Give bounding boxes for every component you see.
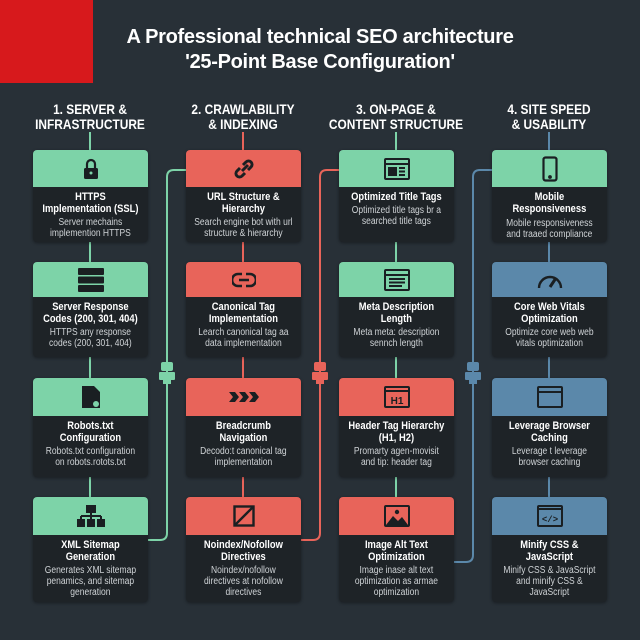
text: XML Sitemap Generation	[61, 539, 120, 563]
text: Minify CSS & JavaScript	[520, 539, 578, 563]
column 3: Optimized title tags br a searched title tags	[352, 205, 441, 227]
title	[126, 26, 514, 73]
text: Meta Description Length	[359, 301, 434, 325]
text: & INDEXING	[208, 116, 278, 132]
robot icons	[159, 362, 175, 384]
text: Canonical Tag Implementation	[209, 301, 278, 325]
text: </>	[541, 515, 558, 525]
text: Leverage t leverage browser caching	[512, 446, 587, 468]
column 3	[339, 150, 454, 242]
column 1	[33, 150, 148, 242]
column headings: 1. SERVER &	[53, 101, 127, 117]
text: Header Tag Hierarchy (H1, H2)	[348, 420, 444, 444]
column 2: URL Structure & Hierarchy	[207, 191, 280, 215]
column 4: Mobile responsiveness and traaed compliance	[506, 218, 593, 240]
text: Noindex/Nofollow Directives	[204, 539, 283, 563]
title: '25-Point Base Configuration'	[185, 51, 455, 73]
text: Image Alt Text Optimization	[365, 539, 428, 563]
column headings	[35, 101, 145, 132]
text: 3. ON-PAGE &	[356, 101, 436, 117]
text: Meta meta: description sennch length	[353, 327, 439, 349]
column 1: Server mechains implemention HTTPS	[50, 217, 131, 239]
column 3: Optimized Title Tags	[351, 191, 442, 203]
text: Optimize core web web vitals optimization	[505, 327, 594, 349]
column 1: HTTPS Implementation (SSL)	[42, 191, 138, 215]
text: Learch canonical tag aa data implementation	[198, 327, 289, 349]
column 4: Mobile Responsiveness	[512, 191, 586, 215]
column 4	[492, 150, 607, 242]
text: Leverage Browser Caching	[509, 420, 590, 444]
text: & USABILITY	[512, 116, 586, 132]
red corner square	[0, 0, 93, 83]
text: Server Response Codes (200, 301, 404)	[43, 301, 138, 325]
text: CONTENT STRUCTURE	[329, 116, 463, 132]
text: Core Web Vitals Optimization	[514, 301, 585, 325]
text: Generates XML sitemap penamics, and sitemap generation	[45, 565, 136, 598]
text: 4. SITE SPEED	[507, 101, 591, 117]
text: HTTPS any response codes (200, 301, 404)	[49, 327, 132, 349]
text: Breadcrumb Navigation	[216, 420, 271, 444]
column 2: Search engine bot with url structure & hierarchy	[194, 217, 293, 239]
text: 2. CRAWLABILITY	[191, 101, 295, 117]
text: Image inase alt text optimization as armae optimization	[355, 565, 438, 598]
text: Noindex/nofollow directives at nofollow directives	[204, 565, 283, 598]
text: Robots.txt Configuration	[60, 420, 121, 444]
text: Robots.txt configuration on robots.rotots.txt	[46, 446, 135, 468]
column 2	[186, 150, 301, 242]
text: Promarty agen-movisit and tip: header tag	[354, 446, 439, 468]
text: Minify CSS & JavaScript and minify CSS & JavaScript	[503, 565, 595, 598]
column headings: INFRASTRUCTURE	[35, 116, 145, 132]
title: A Professional technical SEO architecture	[126, 26, 514, 48]
text: H1	[390, 396, 403, 407]
text: Decodo:t canonical tag implementation	[200, 446, 287, 468]
